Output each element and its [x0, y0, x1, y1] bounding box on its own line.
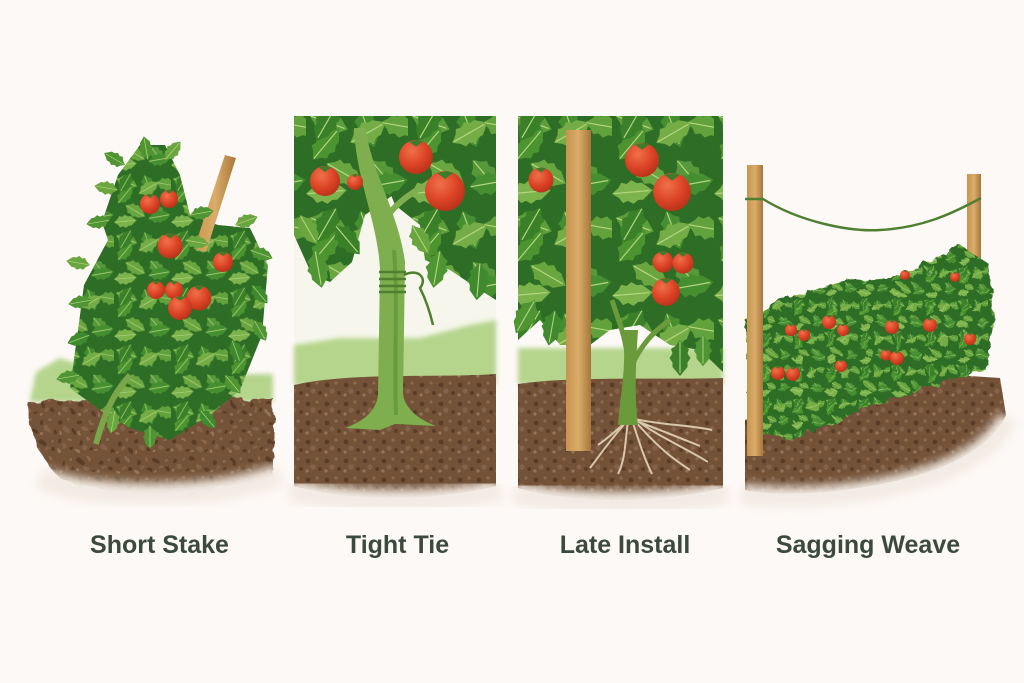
label: Short Stake: Short Stake [90, 531, 229, 559]
edge leaves [55, 135, 275, 449]
soil fade [290, 490, 500, 500]
side branch [388, 182, 432, 215]
stem [618, 330, 638, 425]
panel: tight tie [290, 116, 500, 500]
soil bed [294, 374, 496, 498]
panel: short stake [28, 135, 280, 494]
distant foliage band [518, 348, 723, 385]
tomatoes [310, 140, 465, 211]
tomatoes [528, 143, 694, 306]
far post [967, 174, 981, 274]
tomato plant foliage [70, 145, 268, 440]
exposed roots [590, 418, 712, 474]
canopy left [294, 116, 400, 282]
leaves over stake [184, 204, 215, 251]
hedge row of plants [745, 245, 995, 440]
canopy [518, 116, 723, 372]
label: Sagging Weave: Sagging Weave [776, 531, 960, 559]
label: Tight Tie: Tight Tie [346, 531, 449, 559]
edge leaves [292, 210, 491, 301]
soil strip [745, 370, 1006, 494]
tomatoes [140, 190, 233, 320]
soil fade [742, 418, 1008, 497]
sagging line [745, 198, 981, 230]
thick stem with flared base [345, 128, 436, 430]
short wooden stake [194, 155, 236, 252]
stem branches [612, 300, 670, 370]
soil mound [28, 398, 273, 493]
tomatoes [771, 270, 976, 381]
near post [747, 165, 763, 456]
label: Late Install: Late Install [560, 531, 690, 559]
panel: late install [506, 116, 727, 502]
soil fade [40, 474, 280, 494]
edge leaves [506, 294, 712, 376]
tall wooden stake [566, 130, 591, 451]
soil fade [514, 492, 727, 502]
tight tie knot [379, 272, 433, 325]
soil bed [518, 378, 723, 500]
distant foliage band [30, 358, 273, 402]
main stem [96, 375, 130, 444]
panel: sagging weave [742, 165, 1008, 497]
canopy right [360, 116, 496, 300]
distant foliage band [294, 320, 496, 385]
stem shading [394, 250, 396, 415]
pale sky [294, 116, 496, 386]
